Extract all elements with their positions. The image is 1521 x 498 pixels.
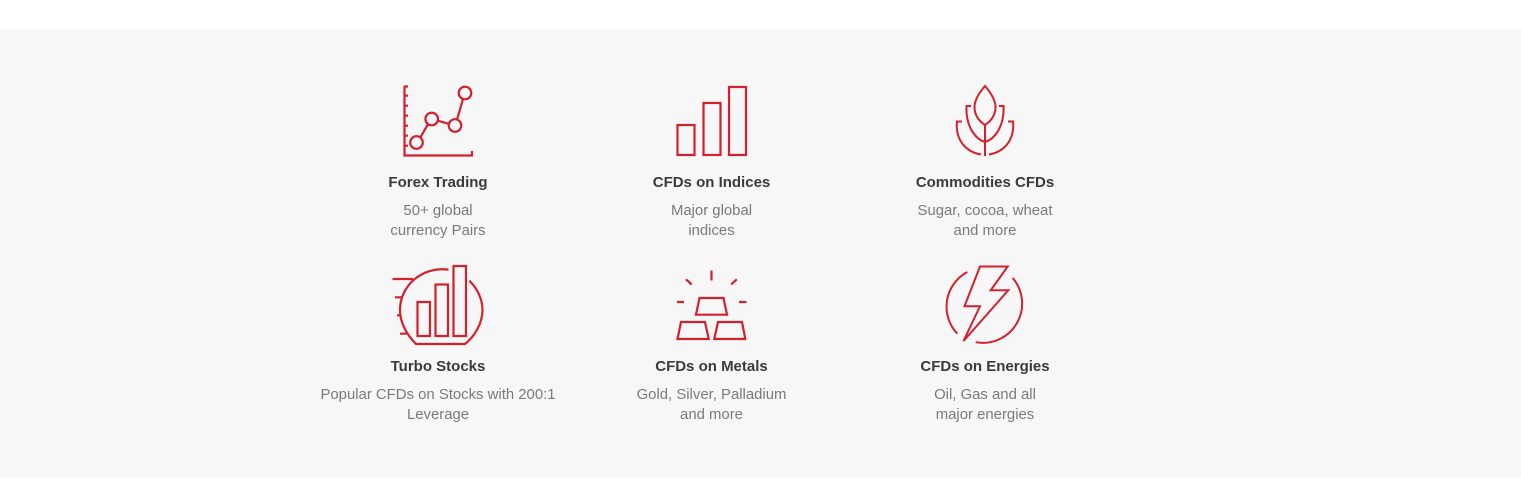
text: currency Pairs xyxy=(390,222,486,238)
icon: energies lightning xyxy=(947,266,1022,343)
text: CFDs on Energies xyxy=(920,358,1050,375)
item: CFDs on Metals xyxy=(637,358,786,422)
text: Forex Trading xyxy=(388,174,488,191)
text: Leverage xyxy=(407,406,469,422)
item: Forex Trading xyxy=(388,174,488,238)
icon: forex line chart xyxy=(404,86,472,156)
text: major energies xyxy=(936,406,1034,422)
item: Turbo Stocks xyxy=(320,358,556,422)
text: 50+ global xyxy=(403,202,473,218)
text: indices xyxy=(688,222,735,238)
text: CFDs on Metals xyxy=(655,358,768,375)
text: CFDs on Indices xyxy=(653,174,770,191)
text: Sugar, cocoa, wheat xyxy=(918,202,1052,218)
text: Gold, Silver, Palladium xyxy=(637,386,786,402)
text: Major global xyxy=(671,202,752,218)
item: CFDs on Indices xyxy=(653,174,770,238)
icon: metals gold bars xyxy=(677,270,746,339)
icon: commodities plant xyxy=(957,86,1013,156)
text: and more xyxy=(954,222,1016,238)
text: and more xyxy=(680,406,743,422)
item: CFDs on Energies xyxy=(920,358,1050,422)
item: Commodities CFDs xyxy=(916,174,1054,238)
text: Turbo Stocks xyxy=(391,358,485,375)
icon: turbo stocks xyxy=(392,266,482,344)
text: Commodities CFDs xyxy=(916,174,1054,191)
icon: indices bars xyxy=(678,87,746,155)
text: Oil, Gas and all xyxy=(934,386,1036,402)
text: Popular CFDs on Stocks with 200:1 xyxy=(320,386,556,402)
